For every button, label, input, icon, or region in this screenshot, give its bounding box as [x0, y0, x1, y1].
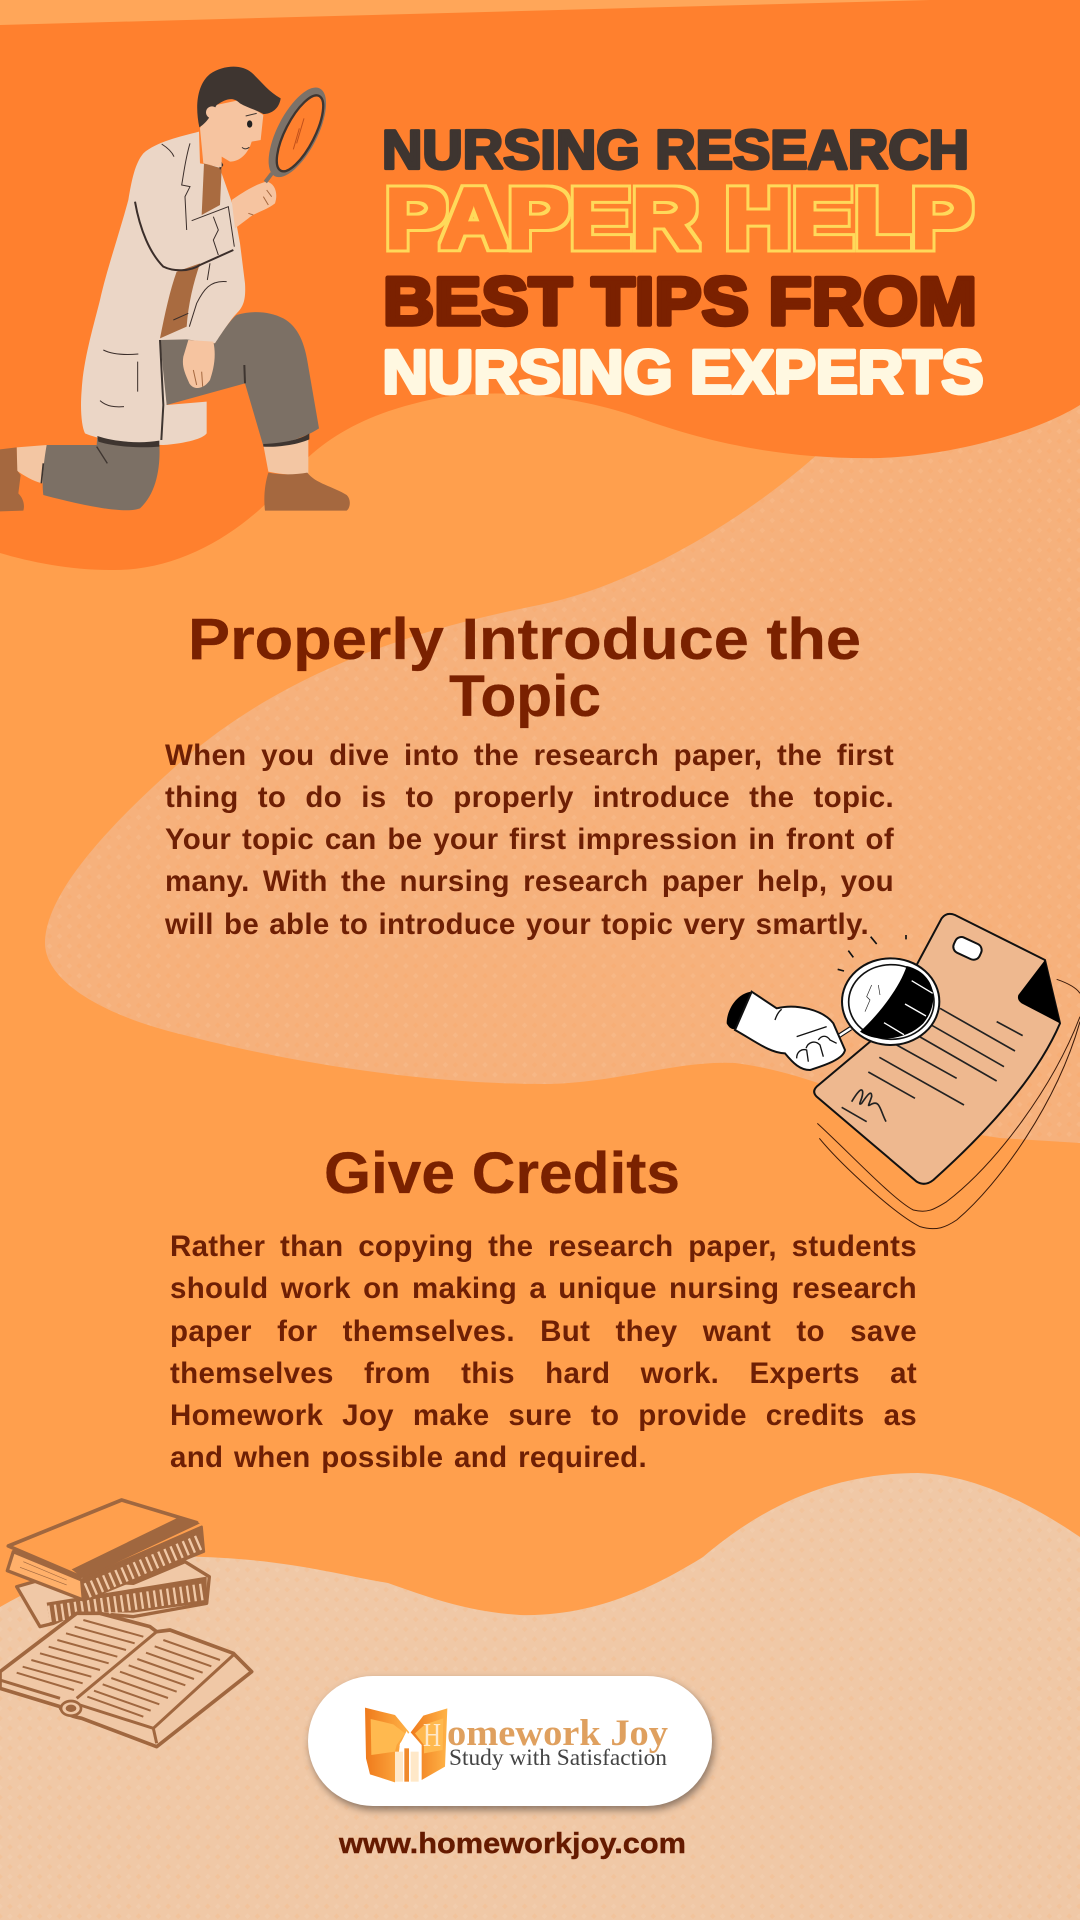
text block: introduce the topic: will be able to introduce your topic very smartly.: [165, 908, 869, 940]
text block: give credits: Rather than copying the research paper, students: [170, 1230, 917, 1263]
title line: paper help: PAPER HELP: [385, 172, 973, 266]
text block: introduce the topic: thing to do is to properly introduce the topic.: [165, 781, 894, 814]
panel: header wave: [0, 0, 1080, 570]
website url: www.homeworkjoy.com: [338, 1828, 686, 1860]
title line: nursing research: NURSING RESEARCH: [382, 119, 969, 181]
title line: best tips from: BEST TIPS FROM: [383, 264, 977, 340]
title: [382, 119, 983, 406]
text block: introduce the topic: [165, 738, 894, 940]
heading: properly introduce the topic: Topic: [449, 664, 601, 729]
heading: properly introduce the topic: Properly Introduce the: [188, 607, 861, 672]
panel: top strip: [0, 0, 1080, 30]
text block: give credits: paper for themselves. But they want to save: [170, 1314, 917, 1348]
text block: introduce the topic: When you dive into the research paper, the first: [165, 738, 894, 772]
text block: give credits: and when possible and required.: [170, 1441, 647, 1474]
heading: give credits: Give Credits: [324, 1141, 680, 1206]
title line: nursing experts: NURSING EXPERTS: [382, 338, 983, 406]
panel: light middle blob: [45, 380, 1080, 1143]
heading: properly introduce the topic: [188, 607, 861, 729]
logo wordmark: omework Joy: [447, 1713, 669, 1754]
text block: give credits: themselves from this hard work. Experts at: [170, 1357, 917, 1390]
text block: give credits: [170, 1230, 917, 1474]
logo pill: [308, 1676, 714, 1810]
icon: researcher with magnifying glass: [0, 67, 350, 511]
text block: give credits: should work on making a unique nursing research: [170, 1272, 917, 1305]
logo letter H: H: [423, 1717, 441, 1754]
icon: magnifier over document: [727, 914, 1080, 1229]
text block: give credits: Homework Joy make sure to provide credits as: [170, 1399, 917, 1432]
logo tagline: Study with Satisfaction: [449, 1745, 667, 1770]
text block: introduce the topic: many. With the nursing research paper help, you: [165, 865, 894, 898]
icon: book and pencil logo: [365, 1708, 447, 1782]
text block: introduce the topic: Your topic can be your first impression in front of: [165, 823, 894, 856]
panel: bottom wave: [0, 1473, 1080, 1920]
icon: stack of books: [0, 1500, 252, 1747]
